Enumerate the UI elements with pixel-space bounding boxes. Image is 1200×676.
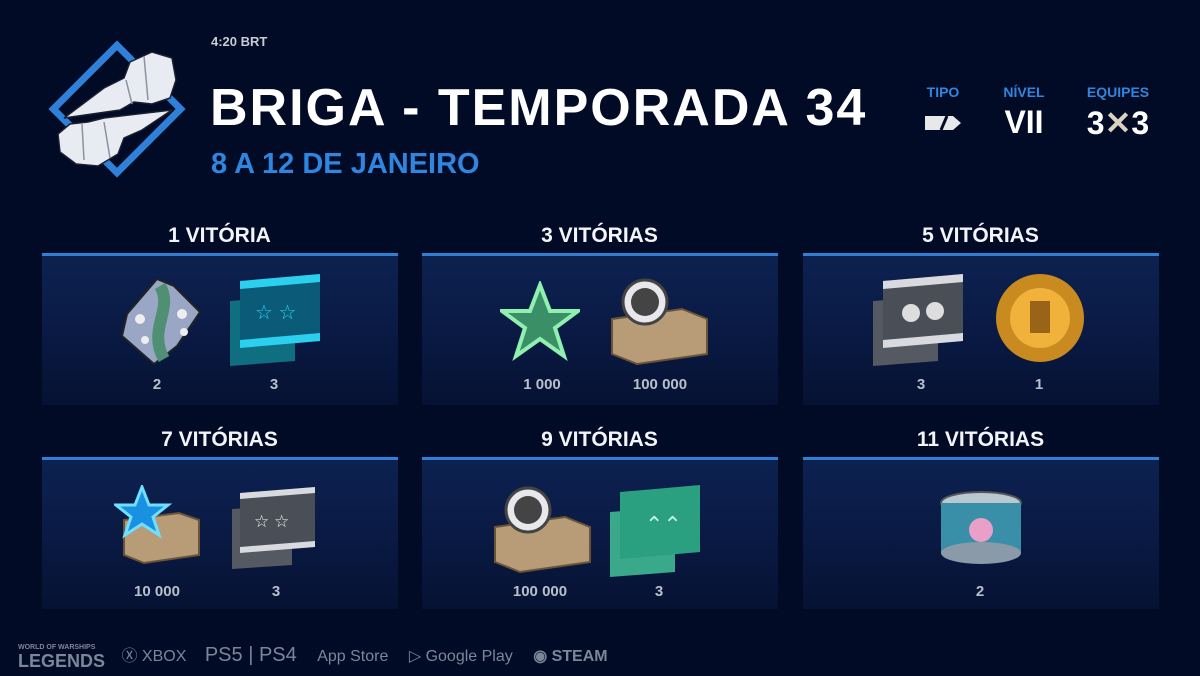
panel: 1 vitoria — [42, 222, 398, 405]
icon: crate with coin — [494, 486, 591, 573]
info: equipes: 3✕3 — [1087, 105, 1149, 141]
info: equipes — [1087, 84, 1149, 141]
panel: 3 vitorias — [422, 222, 778, 405]
panel: 11 vitorias: 2 — [976, 583, 984, 600]
title: BRIGA - TEMPORADA 34 — [210, 79, 867, 137]
icon: flag cyan: ☆ ☆ — [255, 302, 296, 324]
panel: 9 vitorias — [422, 426, 778, 609]
info: nivel — [1003, 84, 1045, 140]
panel: 9 vitorias: 9 VITÓRIAS — [541, 428, 658, 451]
icon: flag grey — [873, 274, 963, 366]
icon: crate with coin — [611, 278, 708, 365]
panel: 1 vitoria: 1 VITÓRIA — [168, 224, 271, 247]
icon: container — [940, 491, 1022, 564]
info: tipo — [925, 84, 961, 130]
info: nivel: VII — [1004, 104, 1044, 140]
panel: 7 vitorias — [42, 426, 398, 609]
panel: 11 vitorias — [803, 426, 1159, 609]
footer: platforms: WORLD OF WARSHIPS — [18, 644, 95, 651]
icon: camouflage — [121, 278, 202, 365]
logo: gauntlets — [48, 40, 186, 178]
info: nivel: NÍVEL — [1003, 84, 1045, 100]
info: tipo: TIPO — [927, 84, 959, 100]
icon: flag green — [610, 485, 700, 577]
panel: 5 vitorias: 1 — [1035, 376, 1043, 393]
panel: 1 vitoria: 2 — [153, 376, 161, 393]
info: equipes: EQUIPES — [1087, 84, 1149, 100]
panel: 5 vitorias — [803, 222, 1159, 405]
panel: 9 vitorias: 3 — [655, 583, 663, 600]
icon: green star — [500, 281, 580, 361]
icon: flag grey stars: ☆ ☆ — [254, 512, 289, 531]
panel: 5 vitorias: 5 VITÓRIAS — [922, 224, 1039, 247]
footer: platforms — [18, 644, 608, 671]
panel: 7 vitorias: 3 — [272, 583, 280, 600]
panel: 3 vitorias: 3 VITÓRIAS — [541, 224, 658, 247]
subtitle: dates: 8 A 12 DE JANEIRO — [211, 148, 480, 180]
panel: 9 vitorias: 100 000 — [513, 583, 567, 600]
panel: 1 vitoria: 3 — [270, 376, 278, 393]
panel: 3 vitorias: 100 000 — [633, 376, 687, 393]
time: 4:20 BRT — [211, 34, 267, 49]
icon: crate with star — [114, 485, 200, 564]
panel: 7 vitorias: 10 000 — [134, 583, 180, 600]
panel: 7 vitorias: 7 VITÓRIAS — [161, 428, 278, 451]
panel: 5 vitorias: 3 — [917, 376, 925, 393]
icon: flag cyan — [230, 274, 320, 366]
panel: 11 vitorias: 11 VITÓRIAS — [917, 428, 1044, 451]
icon: flag grey stars — [232, 487, 315, 569]
icon: flag green: ⌃⌃ — [645, 512, 682, 537]
footer: platforms: Ⓧ XBOX PS5 | PS4 App Store ▷ Google Play ◉ STEAM — [121, 644, 608, 666]
footer: platforms: LEGENDS — [18, 651, 105, 671]
panel: 3 vitorias: 1 000 — [523, 376, 561, 393]
icon: gold emblem — [996, 274, 1084, 362]
